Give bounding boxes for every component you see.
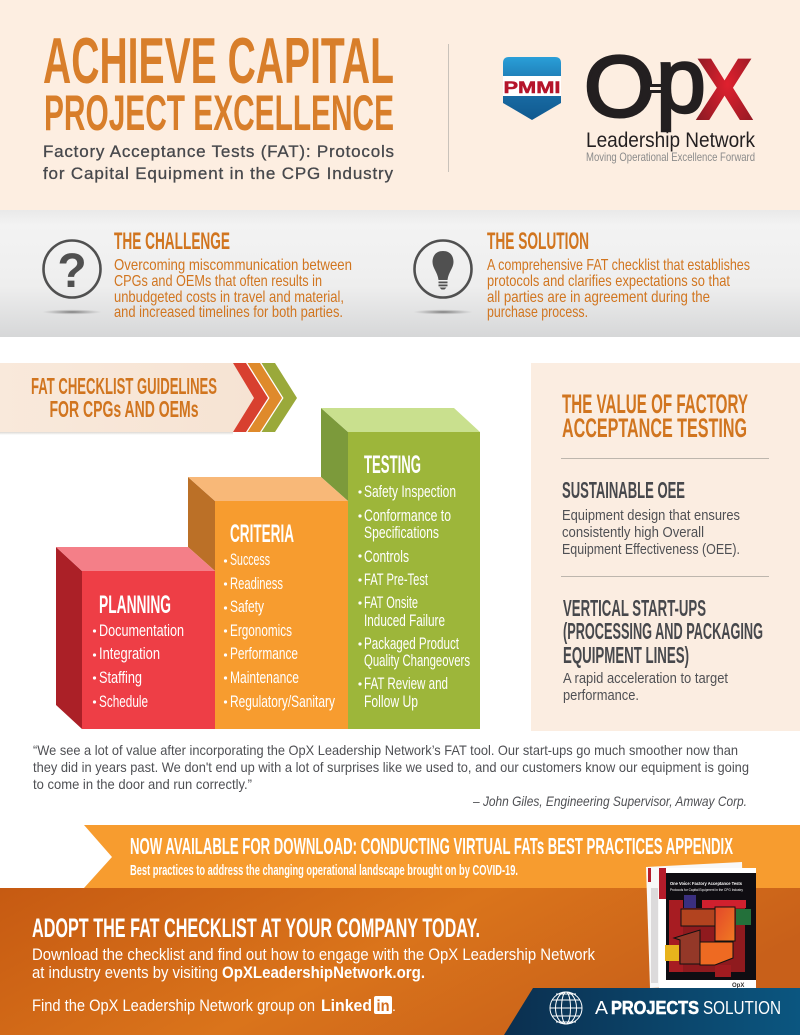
icon: light bulb bbox=[413, 240, 473, 314]
block: testing: Packaged Product bbox=[364, 634, 459, 653]
banner: a projects solution bbox=[504, 988, 800, 1035]
value item: sustainable OEE: Equipment design that ensures bbox=[562, 507, 740, 524]
text: LinkedIn: Linked bbox=[321, 996, 372, 1015]
header panel bbox=[0, 0, 800, 210]
subtitle: for Capital Equipment in the CPG Industry bbox=[43, 164, 394, 183]
block: testing bbox=[321, 408, 480, 729]
title: ACHIEVE CAPITAL bbox=[43, 24, 394, 97]
booklet cover image: OpX bbox=[732, 983, 744, 989]
block: planning bbox=[56, 547, 215, 729]
logo: OpX: O bbox=[584, 39, 655, 135]
testimonial quote: “We see a lot of value after incorporating the OpX Leadership Network’s FAT tool. Our start-ups go much smoother now than bbox=[33, 742, 738, 758]
block: criteria: CRITERIA bbox=[230, 520, 294, 548]
text: challenge body: and increased timelines for both parties. bbox=[114, 304, 343, 321]
title bbox=[43, 24, 394, 141]
logo: PMMI bbox=[503, 57, 561, 120]
banner: virtual FATs appendix bbox=[84, 825, 800, 888]
block: criteria: Performance bbox=[230, 644, 298, 663]
text: solution body bbox=[487, 257, 750, 321]
panel: value of factory acceptance testing bbox=[531, 363, 800, 731]
block: criteria: Success bbox=[230, 550, 270, 569]
text: download: Download the checklist and find out how to engage with the OpX Leadership Network bbox=[32, 945, 595, 964]
panel: call to action bbox=[0, 888, 800, 1035]
block: planning: Documentation bbox=[99, 621, 184, 640]
chart: staircase blocks bbox=[56, 408, 480, 729]
testimonial quote: they did in years past. We don't end up with a lot of surprises like we used to, and our customers know our equipment is going bbox=[33, 759, 749, 775]
block: testing: Induced Failure bbox=[364, 611, 445, 630]
block: testing: FAT Onsite bbox=[364, 593, 418, 612]
block: testing: TESTING bbox=[364, 451, 421, 479]
logo: OpX: Moving Operational Excellence Forward bbox=[586, 150, 755, 164]
icon: question mark: ? bbox=[57, 245, 87, 298]
value item: sustainable OEE: consistently high Overall bbox=[562, 524, 704, 541]
subtitle: Factory Acceptance Tests (FAT): Protocols bbox=[43, 142, 394, 161]
heading: adopt: ADOPT THE FAT CHECKLIST AT YOUR COMPANY TODAY. bbox=[32, 913, 480, 943]
logo: OpX: Leadership Network bbox=[586, 129, 755, 152]
text: a projects solution: PROJECTS bbox=[611, 998, 699, 1018]
heading: the challenge: THE CHALLENGE bbox=[114, 228, 230, 255]
block: testing: Conformance to bbox=[364, 506, 451, 525]
heading: value bbox=[562, 389, 748, 443]
heading: the solution: THE SOLUTION bbox=[487, 228, 589, 255]
title: PROJECT EXCELLENCE bbox=[44, 85, 394, 141]
block: testing: Specifications bbox=[364, 523, 439, 542]
attribution: – John Giles, Engineering Supervisor, Amway Corp. bbox=[472, 793, 747, 809]
panel: challenge and solution band bbox=[0, 210, 800, 337]
block: planning: Integration bbox=[99, 644, 160, 663]
value item: sustainable OEE: SUSTAINABLE OEE bbox=[562, 477, 685, 503]
text: solution body: protocols and clarifies expectations so that bbox=[487, 273, 730, 290]
logo: OpX bbox=[584, 30, 755, 164]
block: planning: PLANNING bbox=[99, 591, 171, 619]
block: testing: Controls bbox=[364, 547, 409, 566]
arrow: chevrons bbox=[233, 363, 297, 432]
value item: vertical start-ups: performance. bbox=[563, 687, 639, 704]
testimonial quote bbox=[33, 742, 749, 809]
text: challenge body: unbudgeted costs in travel and material, bbox=[114, 289, 344, 306]
block: testing: Safety Inspection bbox=[364, 482, 456, 501]
text: download bbox=[32, 945, 595, 982]
text: download: at industry events by visiting bbox=[32, 963, 218, 982]
block: criteria: Safety bbox=[230, 597, 264, 616]
value item: vertical start-ups: EQUIPMENT LINES) bbox=[563, 642, 689, 668]
logo: OpX: p bbox=[656, 30, 706, 132]
block: planning: Staffing bbox=[99, 668, 142, 687]
text: challenge body: Overcoming miscommunication between bbox=[114, 257, 352, 274]
heading: guidelines bbox=[31, 373, 217, 422]
text: LinkedIn: . bbox=[392, 998, 396, 1014]
banner: FAT checklist guidelines bbox=[0, 363, 297, 435]
block: testing: Follow Up bbox=[364, 692, 418, 711]
booklet cover image bbox=[646, 862, 756, 989]
text: LinkedIn: in bbox=[376, 998, 390, 1015]
block: criteria bbox=[188, 477, 348, 729]
logo: OpX: X bbox=[695, 39, 754, 139]
panel: solution bbox=[413, 228, 750, 321]
block: planning: Schedule bbox=[99, 692, 148, 711]
icon: globe bbox=[550, 992, 582, 1024]
text: challenge body: CPGs and OEMs that often results in bbox=[114, 273, 322, 290]
text: a projects solution: SOLUTION bbox=[703, 998, 781, 1018]
banner: virtual FATs appendix: Best practices to address the changing operational landscape brought on by COVID-19. bbox=[130, 863, 518, 879]
block: criteria: Readiness bbox=[230, 574, 283, 593]
panel: challenge bbox=[42, 228, 352, 321]
text: a projects solution bbox=[595, 998, 781, 1018]
text: solution body: purchase process. bbox=[487, 304, 588, 321]
text: download: OpXLeadershipNetwork.org. bbox=[222, 963, 425, 982]
testimonial quote: to come in the door and run correctly.” bbox=[33, 776, 252, 792]
text: LinkedIn: Find the OpX Leadership Network group on bbox=[32, 996, 315, 1015]
value item: sustainable OEE: Equipment Effectiveness (OEE). bbox=[562, 541, 740, 558]
heading: guidelines: FAT CHECKLIST GUIDELINES bbox=[31, 373, 217, 399]
logo: PMMI: PMMI bbox=[504, 78, 560, 97]
value item: vertical start-ups: A rapid acceleration to target bbox=[563, 670, 729, 687]
block: testing: FAT Review and bbox=[364, 674, 448, 693]
booklet cover image: Protocols for Capital Equipment in the CPG Industry bbox=[670, 888, 743, 892]
block: criteria: Maintenance bbox=[230, 668, 299, 687]
text: solution body: all parties are in agreement during the bbox=[487, 289, 710, 306]
booklet cover image: One Voice: Factory Acceptance Tests bbox=[670, 881, 742, 886]
icon: question mark bbox=[42, 240, 102, 314]
block: criteria: Ergonomics bbox=[230, 621, 292, 640]
subtitle bbox=[43, 142, 394, 183]
text: challenge body bbox=[114, 257, 352, 321]
text: a projects solution: A bbox=[595, 998, 608, 1018]
block: testing: Quality Changeovers bbox=[364, 651, 470, 670]
value item: sustainable OEE bbox=[562, 477, 740, 558]
block: testing: FAT Pre-Test bbox=[364, 570, 428, 589]
value item: vertical start-ups bbox=[563, 595, 763, 704]
block: criteria: Regulatory/Sanitary bbox=[230, 692, 335, 711]
heading: guidelines: FOR CPGs AND OEMs bbox=[50, 396, 198, 422]
